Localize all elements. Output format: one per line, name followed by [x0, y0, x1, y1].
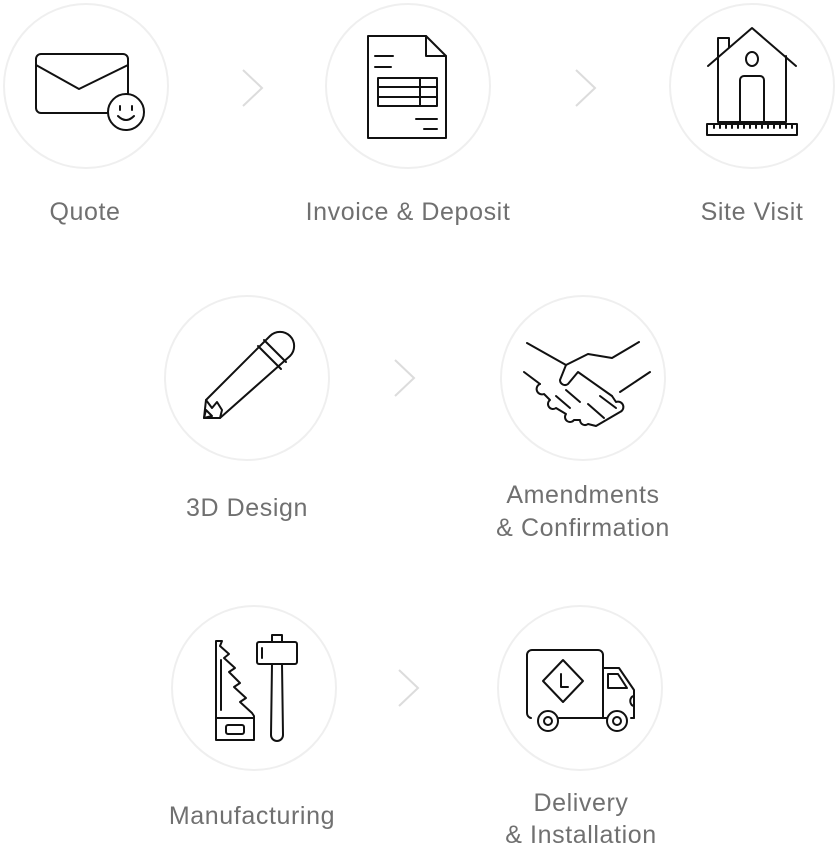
icon: house with ruler [707, 28, 797, 135]
label: site visit: Site Visit [701, 198, 803, 226]
arrow 2 [576, 70, 595, 106]
label: delivery: Delivery [533, 789, 629, 817]
label: amendments: Amendments [506, 481, 660, 509]
step: amendments: & Confirmation [496, 514, 670, 542]
label: manufacturing: Manufacturing [169, 802, 335, 830]
step: 3d design [165, 296, 329, 522]
step: delivery [498, 606, 662, 845]
step: quote [4, 4, 168, 226]
icon: handshake [524, 342, 650, 426]
icon: invoice document [368, 36, 446, 138]
step: invoice [306, 4, 510, 226]
label: quote: Quote [49, 198, 121, 226]
arrow 3 [395, 360, 414, 396]
icon: truck [527, 650, 634, 731]
step: amendments [496, 296, 670, 542]
icon: saw and mallet [216, 635, 297, 741]
icon: pencil [204, 332, 294, 418]
arrow 1 [243, 70, 262, 106]
arrow 4 [399, 670, 418, 706]
label: 3d design: 3D Design [186, 494, 308, 522]
step: manufacturing [169, 606, 336, 830]
step: site visit [670, 4, 834, 226]
icon: envelope with smiley [36, 54, 144, 130]
label: invoice: Invoice & Deposit [306, 198, 510, 226]
